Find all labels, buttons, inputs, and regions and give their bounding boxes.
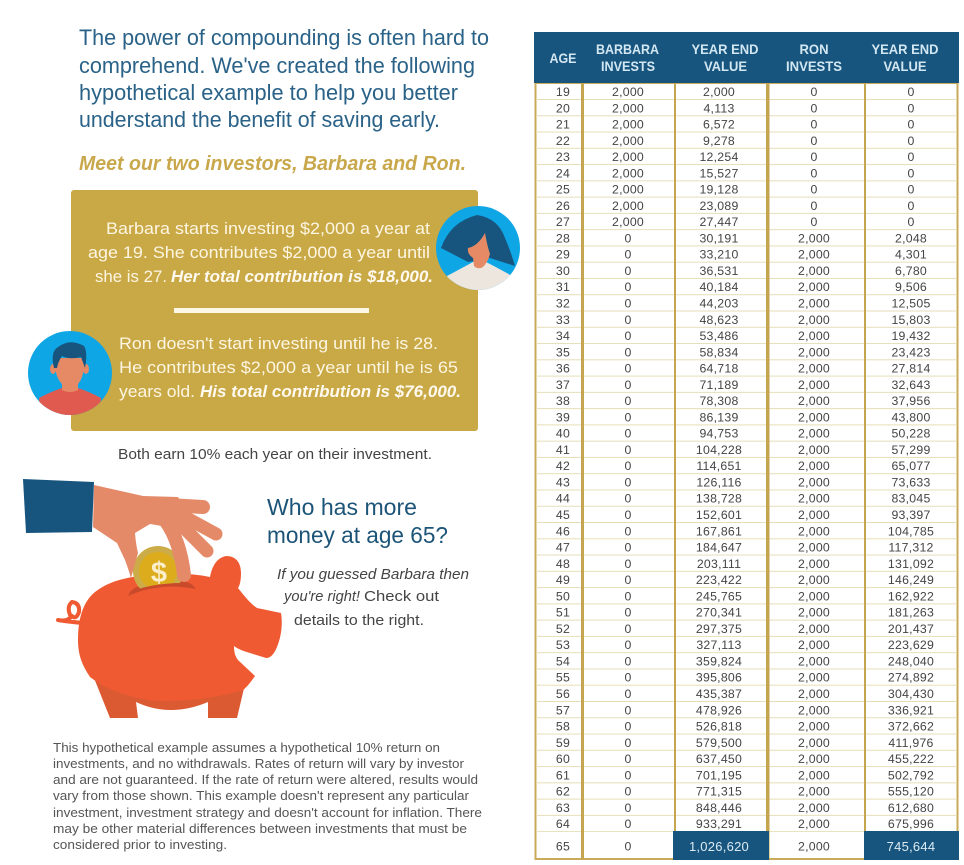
table rows: 162,922 [888, 589, 934, 603]
table header: BARBARA [596, 41, 659, 57]
table rows: 0 [624, 231, 632, 245]
table rows: 0 [624, 720, 632, 734]
text: 10% note: Both earn 10% each year on their investment. [118, 446, 432, 463]
text: disclaimer: This hypothetical example assumes a hypothetical 10% return on [53, 740, 440, 755]
table rows: 0 [624, 394, 632, 408]
heading: meet the investors: Meet our two investors, Barbara and Ron. [79, 153, 466, 175]
table rows: 12,254 [699, 150, 739, 164]
text: Barbara description [88, 219, 433, 286]
table rows: 372,662 [888, 720, 934, 734]
table header [534, 32, 959, 83]
table rows: 53 [556, 638, 570, 652]
table rows: 395,806 [696, 671, 742, 685]
table rows: 0 [624, 817, 632, 831]
table rows: 32,643 [891, 378, 931, 392]
icon: pig body [78, 556, 282, 701]
text: disclaimer: may be other material differences between investments that must be [53, 821, 467, 836]
table rows: 848,446 [696, 801, 742, 815]
heading: who has more money [267, 494, 448, 548]
intro paragraph: The power of compounding is often hard to [79, 25, 489, 50]
table rows: 9,506 [895, 280, 927, 294]
text: disclaimer: investments, and no withdrawals. Rates of return will vary by investor [53, 756, 465, 771]
table header: YEAR END [872, 41, 938, 57]
table rows: 2,000 [612, 101, 644, 115]
table rows: 15,803 [891, 313, 931, 327]
table rows: 274,892 [888, 671, 934, 685]
table rows: 62 [556, 785, 570, 799]
table rows: 26 [556, 199, 570, 213]
table rows: 2,000 [798, 720, 830, 734]
intro paragraph: understand the benefit of saving early. [79, 107, 440, 132]
table rows: 0 [810, 85, 818, 99]
table rows: 23,089 [699, 199, 739, 213]
table rows: 61 [556, 768, 570, 782]
table rows: 2,000 [798, 573, 830, 587]
table rows: 270,341 [696, 606, 742, 620]
table rows: 64 [556, 817, 570, 831]
table rows: 181,263 [888, 606, 934, 620]
table rows: 6,572 [703, 118, 735, 132]
table rows: 31 [556, 280, 570, 294]
table rows: 52 [556, 622, 570, 636]
table rows: 28 [556, 231, 570, 245]
table rows: 64,718 [699, 362, 739, 376]
table rows: 0 [907, 215, 915, 229]
table rows: 2,000 [612, 118, 644, 132]
table rows: 40 [556, 427, 570, 441]
table header: RON [800, 41, 828, 57]
table rows: 65 [556, 840, 570, 854]
table rows: 0 [624, 703, 632, 717]
table rows: 2,000 [798, 703, 830, 717]
table rows: 0 [810, 215, 818, 229]
table rows: 47 [556, 541, 570, 555]
table rows: 0 [624, 492, 632, 506]
intro paragraph [79, 25, 489, 132]
table rows: 39 [556, 410, 570, 424]
icon: sleeve [23, 479, 94, 533]
table rows: 327,113 [696, 638, 742, 652]
heading: who has more money: Who has more [267, 494, 417, 520]
table rows: 336,921 [888, 703, 934, 717]
table rows: 2,000 [798, 313, 830, 327]
table rows: 0 [624, 557, 632, 571]
table rows: 2,000 [798, 589, 830, 603]
table header: INVESTS [786, 58, 842, 74]
table rows: 51 [556, 606, 570, 620]
icon: coin [133, 546, 181, 588]
table rows: 146,249 [888, 573, 934, 587]
table rows: 126,116 [696, 476, 742, 490]
table rows: 2,000 [612, 215, 644, 229]
table rows: 37,956 [891, 394, 931, 408]
table rows: 0 [907, 150, 915, 164]
table rows: 53,486 [699, 329, 739, 343]
table rows: 0 [907, 134, 915, 148]
icon: coin slot [128, 581, 196, 596]
text: Barbara description: Her total contribution is $18,000. [171, 267, 433, 286]
table rows: 2,000 [798, 817, 830, 831]
table rows: 2,000 [798, 394, 830, 408]
table rows: 637,450 [696, 752, 742, 766]
table rows: 38 [556, 394, 570, 408]
table rows: 50 [556, 589, 570, 603]
table rows: 2,000 [798, 280, 830, 294]
text: disclaimer: vary from those shown. This example doesn't represent any particular [53, 788, 470, 803]
table rows: 104,785 [888, 524, 934, 538]
panel: investor descriptions [71, 190, 478, 431]
table rows: 33,210 [699, 248, 739, 262]
text: answer: details to the right. [294, 612, 424, 629]
table rows: 29 [556, 248, 570, 262]
table rows: 675,996 [888, 817, 934, 831]
table rows: 184,647 [696, 541, 742, 555]
table rows: 2,000 [798, 541, 830, 555]
table rows: 20 [556, 101, 570, 115]
table rows: 58,834 [699, 345, 739, 359]
table rows: 2,000 [798, 508, 830, 522]
table rows: 223,629 [888, 638, 934, 652]
table rows: 0 [624, 345, 632, 359]
table rows: 30 [556, 264, 570, 278]
text: Barbara description: Barbara starts investing $2,000 a year at [106, 219, 430, 238]
table rows: 359,824 [696, 654, 742, 668]
table rows: 502,792 [888, 768, 934, 782]
table rows: 0 [624, 589, 632, 603]
table rows: 24 [556, 166, 570, 180]
icon: Ron avatar [28, 331, 112, 420]
table rows: 4,113 [703, 101, 735, 115]
table rows: 2,000 [798, 492, 830, 506]
table rows: 25 [556, 183, 570, 197]
table rows: 15,527 [699, 166, 739, 180]
table rows: 0 [907, 199, 915, 213]
table rows: 54 [556, 654, 570, 668]
table rows: 526,818 [696, 720, 742, 734]
table rows: 42 [556, 459, 570, 473]
table rows: 43 [556, 476, 570, 490]
table rows: 201,437 [888, 622, 934, 636]
table rows: 411,976 [888, 736, 934, 750]
table rows: 0 [624, 296, 632, 310]
table rows: 612,680 [888, 801, 934, 815]
table rows: 114,651 [696, 459, 742, 473]
table rows: 0 [624, 687, 632, 701]
text: answer: If you guessed Barbara then [277, 566, 469, 583]
table rows: 0 [624, 508, 632, 522]
table rows: 2,000 [798, 524, 830, 538]
table rows: 59 [556, 736, 570, 750]
table rows: 2,000 [798, 654, 830, 668]
table rows: 2,000 [798, 768, 830, 782]
table rows: 2,000 [798, 443, 830, 457]
table rows: 701,195 [696, 768, 742, 782]
table rows: 0 [624, 524, 632, 538]
table rows: 93,397 [891, 508, 931, 522]
text: answer: Check out [364, 588, 440, 605]
table rows: 0 [624, 840, 632, 854]
intro paragraph: comprehend. We've created the following [79, 53, 475, 78]
table rows: 2,000 [798, 231, 830, 245]
table rows: 0 [624, 752, 632, 766]
table rows: 56 [556, 687, 570, 701]
table rows: 55 [556, 671, 570, 685]
table rows: 435,387 [696, 687, 742, 701]
icon: coin: $ [151, 557, 167, 589]
table rows: 36,531 [699, 264, 739, 278]
highlight: Barbara final value: 1,026,620 [689, 839, 749, 854]
intro paragraph: hypothetical example to help you better [79, 80, 458, 105]
icon: Barbara avatar [436, 206, 520, 295]
table rows: 2,000 [798, 296, 830, 310]
table rows: 0 [624, 362, 632, 376]
table rows: 86,139 [699, 410, 739, 424]
text: answer [277, 566, 469, 629]
table rows: 2,000 [798, 687, 830, 701]
table rows: 304,430 [888, 687, 934, 701]
table rows: 297,375 [696, 622, 742, 636]
table rows: 152,601 [696, 508, 742, 522]
highlight: Ron final value [864, 831, 959, 860]
table rows: 44 [556, 492, 570, 506]
table rows: 36 [556, 362, 570, 376]
table rows: 0 [810, 134, 818, 148]
table rows: 0 [907, 101, 915, 115]
table rows: 2,000 [798, 801, 830, 815]
text: Ron description: His total contribution is $76,000. [200, 382, 461, 401]
table rows: 0 [624, 329, 632, 343]
table rows [556, 85, 934, 854]
table rows: 2,000 [798, 622, 830, 636]
table rows: 9,278 [703, 134, 735, 148]
table rows: 0 [810, 101, 818, 115]
table rows: 2,000 [612, 85, 644, 99]
table rows: 58 [556, 720, 570, 734]
table rows: 0 [624, 280, 632, 294]
table rows: 2,000 [612, 183, 644, 197]
table rows: 2,000 [798, 606, 830, 620]
table rows: 0 [624, 443, 632, 457]
table rows: 2,000 [798, 410, 830, 424]
table rows: 65,077 [891, 459, 931, 473]
text: Barbara description: age 19. She contributes $2,000 a year until [88, 243, 430, 262]
table rows: 27 [556, 215, 570, 229]
table rows: 40,184 [699, 280, 739, 294]
table rows: 2,000 [798, 329, 830, 343]
table rows: 2,000 [798, 362, 830, 376]
table header: YEAR END [692, 41, 758, 57]
text: disclaimer: and are not guaranteed. If the rate of return were altered, results would [53, 772, 478, 787]
table rows: 167,861 [696, 524, 742, 538]
table rows: 0 [907, 166, 915, 180]
table rows: 2,000 [798, 736, 830, 750]
text: Ron description: years old. [119, 382, 195, 401]
table rows: 0 [624, 264, 632, 278]
table rows: 0 [624, 768, 632, 782]
table rows: 94,753 [699, 427, 739, 441]
table rows: 0 [810, 150, 818, 164]
table rows: 223,422 [696, 573, 742, 587]
table rows: 2,000 [798, 840, 830, 854]
table rows: 48 [556, 557, 570, 571]
table rows: 33 [556, 313, 570, 327]
table rows: 2,000 [798, 459, 830, 473]
text: Barbara description: she is 27. [95, 267, 167, 286]
table rows: 2,048 [895, 231, 927, 245]
table rows: 0 [624, 622, 632, 636]
table rows: 0 [624, 378, 632, 392]
icon: pig legs [94, 678, 245, 718]
table rows: 0 [810, 166, 818, 180]
table rows: 0 [624, 459, 632, 473]
table rows: 0 [624, 313, 632, 327]
table rows: 60 [556, 752, 570, 766]
table rows: 2,000 [703, 85, 735, 99]
text: disclaimer: considered prior to investing. [53, 837, 227, 852]
table rows: 0 [624, 785, 632, 799]
table rows: 0 [907, 85, 915, 99]
table header: VALUE [884, 58, 926, 74]
table rows: 63 [556, 801, 570, 815]
table rows: 57 [556, 703, 570, 717]
table rows: 73,633 [891, 476, 931, 490]
table rows: 0 [624, 248, 632, 262]
heading: who has more money: money at age 65? [267, 522, 448, 548]
table rows: 203,111 [697, 557, 741, 571]
table rows: 0 [624, 654, 632, 668]
table rows: 2,000 [798, 752, 830, 766]
table rows: 2,000 [798, 785, 830, 799]
icon: hand [93, 485, 216, 578]
table rows: 48,623 [699, 313, 739, 327]
table rows: 49 [556, 573, 570, 587]
table rows: 478,926 [696, 703, 742, 717]
highlight: Ron final value: 745,644 [887, 839, 935, 854]
table rows: 23 [556, 150, 570, 164]
table rows: 0 [624, 638, 632, 652]
table rows: 2,000 [612, 166, 644, 180]
table rows: 46 [556, 524, 570, 538]
table rows: 0 [810, 199, 818, 213]
table rows: 0 [624, 801, 632, 815]
table rows: 19,432 [891, 329, 931, 343]
table rows: 245,765 [696, 589, 742, 603]
table rows: 0 [624, 410, 632, 424]
table rows: 2,000 [798, 248, 830, 262]
text: answer: you're right! [283, 588, 361, 605]
table rows: 0 [810, 118, 818, 132]
table rows: 2,000 [798, 378, 830, 392]
highlight: Barbara final value [673, 831, 769, 860]
table rows: 555,120 [888, 785, 934, 799]
illustration: hand dropping coin in piggy bank [23, 479, 282, 718]
table header: VALUE [704, 58, 747, 74]
text: Ron description: He contributes $2,000 a year until he is 65 [119, 358, 458, 377]
table rows: 41 [556, 443, 570, 457]
table rows: 71,189 [699, 378, 739, 392]
table rows: 2,000 [798, 345, 830, 359]
text: Ron description: Ron doesn't start investing until he is 28. [119, 334, 438, 353]
table rows: 933,291 [696, 817, 742, 831]
icon: pig tail [58, 602, 84, 623]
table rows: 771,315 [696, 785, 742, 799]
table rows: 0 [624, 606, 632, 620]
table rows: 35 [556, 345, 570, 359]
text: disclaimer: investment, investment strategy and doesn't account for inflation. There [53, 805, 482, 820]
table rows: 4,301 [895, 248, 927, 262]
table rows: 57,299 [891, 443, 931, 457]
table rows: 0 [810, 183, 818, 197]
table rows: 44,203 [699, 296, 739, 310]
table: investment comparison [534, 32, 959, 860]
table rows: 21 [556, 118, 570, 132]
table rows: 455,222 [888, 752, 934, 766]
table rows: 0 [907, 183, 915, 197]
table rows: 248,040 [888, 654, 934, 668]
table rows: 0 [624, 573, 632, 587]
table rows: 2,000 [798, 264, 830, 278]
table header: AGE [550, 50, 576, 66]
text: disclaimer [53, 740, 482, 852]
table rows: 6,780 [895, 264, 927, 278]
table rows: 22 [556, 134, 570, 148]
table rows: 0 [907, 118, 915, 132]
table rows: 19 [556, 85, 570, 99]
table rows: 45 [556, 508, 570, 522]
table rows: 32 [556, 296, 570, 310]
table rows: 2,000 [798, 557, 830, 571]
table rows: 0 [624, 736, 632, 750]
table rows: 34 [556, 329, 570, 343]
table rows: 104,228 [696, 443, 742, 457]
table rows: 2,000 [612, 134, 644, 148]
table rows: 0 [624, 541, 632, 555]
table rows: 117,312 [888, 541, 934, 555]
table rows: 37 [556, 378, 570, 392]
table rows: 0 [624, 671, 632, 685]
table rows: 50,228 [891, 427, 931, 441]
table rows: 27,447 [699, 215, 739, 229]
table header: INVESTS [601, 58, 655, 74]
table rows: 2,000 [612, 150, 644, 164]
text: Ron description [119, 334, 461, 401]
table rows: 43,800 [891, 410, 931, 424]
table rows: 78,308 [699, 394, 739, 408]
table rows: 0 [624, 427, 632, 441]
table rows: 27,814 [891, 362, 931, 376]
table rows: 131,092 [888, 557, 934, 571]
table rows: 2,000 [798, 427, 830, 441]
table rows: 83,045 [891, 492, 931, 506]
table rows: 12,505 [891, 296, 931, 310]
table rows: 19,128 [699, 183, 739, 197]
table rows: 2,000 [798, 638, 830, 652]
table rows: 138,728 [696, 492, 742, 506]
table rows: 579,500 [696, 736, 742, 750]
table rows: 30,191 [699, 231, 739, 245]
table rows: 0 [624, 476, 632, 490]
table rows: 2,000 [798, 671, 830, 685]
table rows: 2,000 [798, 476, 830, 490]
table rows: 2,000 [612, 199, 644, 213]
table rows: 23,423 [891, 345, 931, 359]
